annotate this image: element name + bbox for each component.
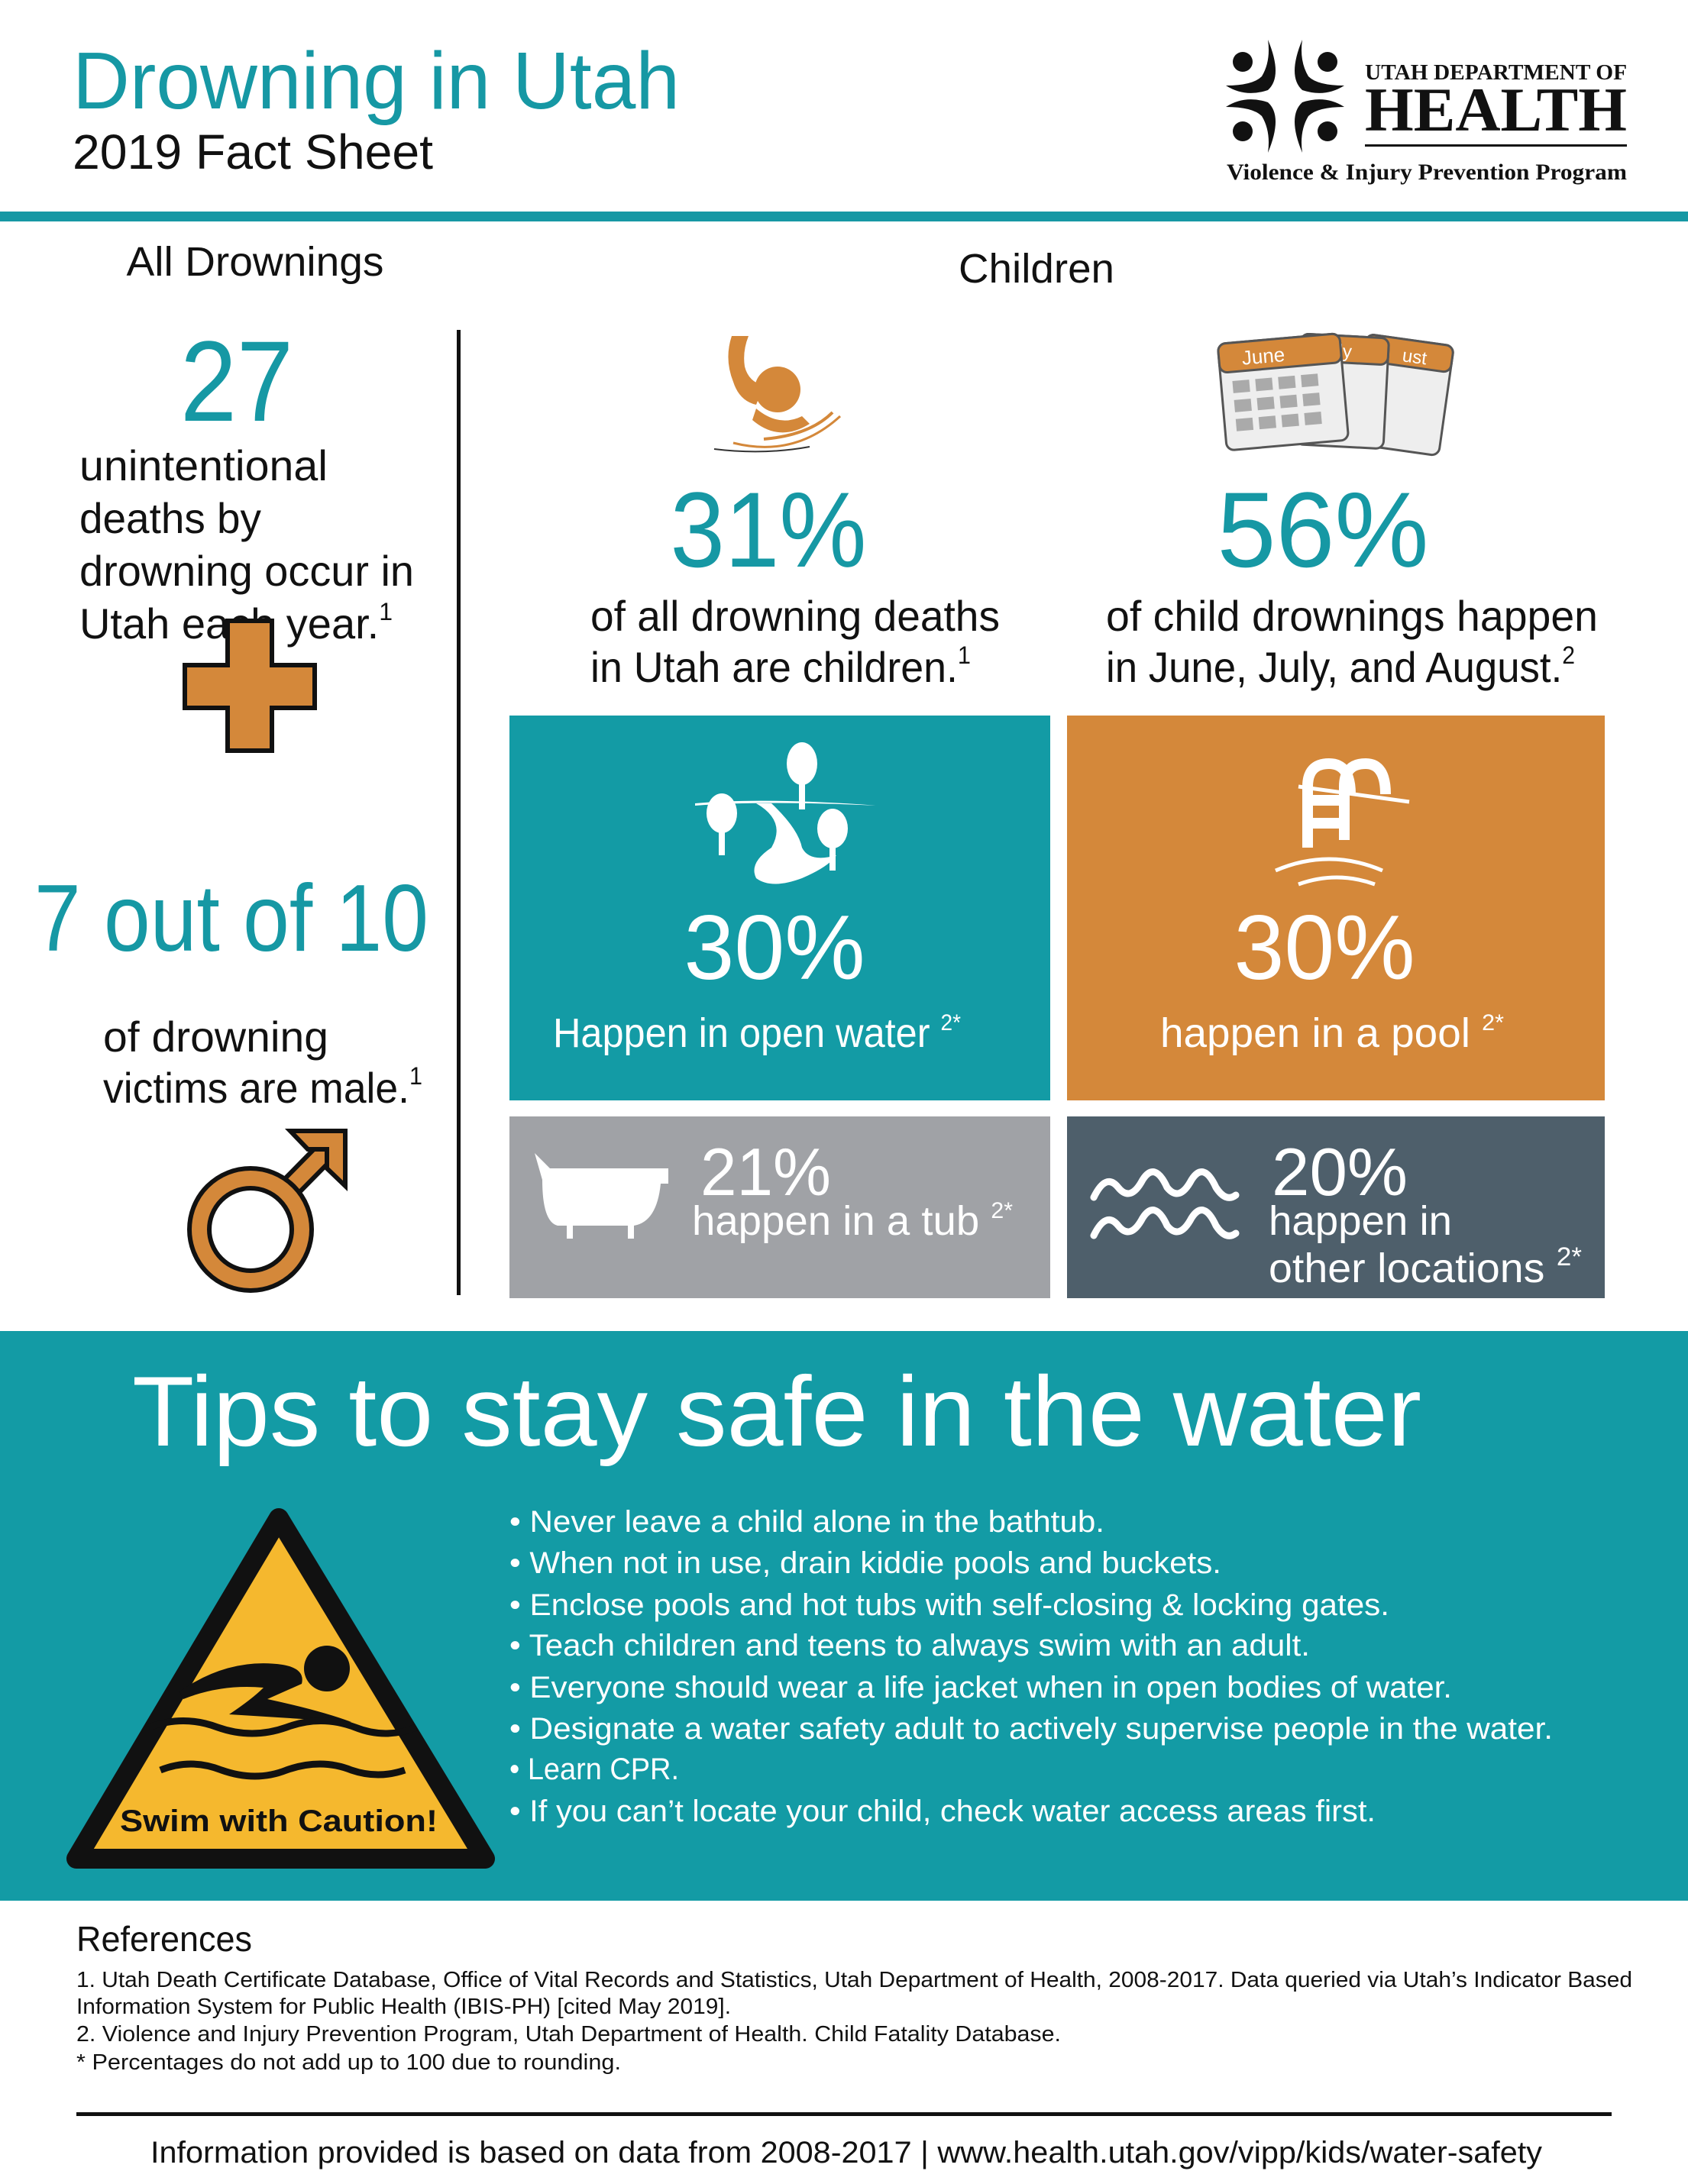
references: References xyxy=(76,1919,252,1959)
logo: Utah Department of Health xyxy=(1226,40,1627,185)
panel: other locations xyxy=(1067,1116,1605,1298)
icon: cross xyxy=(185,621,315,751)
icon: swim with caution sign: Swim with Caution! xyxy=(120,1804,438,1838)
panel: other locations: other locations xyxy=(1269,1245,1537,1291)
logo: Utah Department of Health: UTAH DEPARTMENT OF xyxy=(1365,61,1627,85)
text block: tips list: • Teach children and teens to always swim with an adult. xyxy=(509,1629,1310,1662)
stat: 7 out of 10 male: 7 out of 10 xyxy=(34,866,428,971)
footer: Information provided is based on data from 2008-2017 | www.health.utah.gov/vipp/kids/water-safety xyxy=(150,2136,1542,2169)
panel: other locations: 2* xyxy=(1557,1242,1582,1271)
panel: open water: Happen in open water xyxy=(553,1010,956,1056)
panel: tub: happen in a tub xyxy=(692,1198,976,1244)
references xyxy=(76,1919,1632,2075)
panel: pool xyxy=(1067,716,1605,1100)
panel: tub: 21% xyxy=(700,1134,831,1210)
icon: calendars: ust xyxy=(1401,345,1428,369)
heading: tips: Tips to stay safe in the water xyxy=(132,1355,1421,1467)
stat: 31% children xyxy=(590,470,1000,691)
panel: open water: 30% xyxy=(684,897,865,999)
icon: calendars: ly xyxy=(1338,341,1353,362)
stat: 56% summer: in June, July, and August. xyxy=(1106,643,1590,691)
stat: 56% summer: of child drownings happen xyxy=(1106,592,1598,640)
icon: calendars xyxy=(1217,334,1454,456)
stat: 7 out of 10 male: victims are male. xyxy=(103,1064,424,1112)
stat: 27 deaths: drowning occur in xyxy=(79,547,414,595)
stat: 27 deaths: 27 xyxy=(180,317,293,445)
logo: Utah Department of Health: HEALTH xyxy=(1365,75,1627,144)
text block: tips list: • Enclose pools and hot tubs with self-closing & locking gates. xyxy=(509,1588,1389,1622)
title: 2019 Fact Sheet xyxy=(73,124,433,179)
stat: 56% summer xyxy=(1106,470,1598,691)
references: * Percentages do not add up to 100 due to rounding. xyxy=(76,2050,621,2075)
title: Drowning in Utah xyxy=(73,36,680,126)
references: Information System for Public Health (IBIS-PH) [cited May 2019]. xyxy=(76,1995,731,2019)
panel: tub: 2* xyxy=(991,1198,1013,1223)
icon: pool ladder xyxy=(1276,764,1409,884)
stat: 27 deaths: Utah each year. xyxy=(79,599,379,648)
stat: 7 out of 10 male: of drowning xyxy=(103,1013,328,1061)
text block: tips list: • Never leave a child alone in the bathtub. xyxy=(509,1505,1104,1539)
text block: tips list: • Learn CPR. xyxy=(509,1753,679,1786)
logo: Utah Department of Health: Violence & Injury Prevention Program xyxy=(1227,160,1627,185)
icon: bathtub xyxy=(535,1153,668,1239)
panel: tips xyxy=(0,1331,1688,1901)
heading: Children: Children xyxy=(959,246,1114,292)
panel: open water xyxy=(509,716,1050,1100)
panel: other locations: 20% xyxy=(1272,1134,1408,1210)
stat: 27 deaths: deaths by xyxy=(79,494,261,542)
panel: open water: 2* xyxy=(941,1010,961,1035)
stat: 7 out of 10 male: 1 xyxy=(409,1062,422,1090)
panel: pool: happen in a pool xyxy=(1160,1010,1465,1056)
text block: tips list: • Designate a water safety adult to actively supervise people in the water. xyxy=(509,1712,1553,1746)
panel: other locations: happen in xyxy=(1269,1198,1452,1244)
icon: river and trees xyxy=(695,742,878,884)
title xyxy=(73,36,680,179)
stat: 7 out of 10 male xyxy=(34,866,428,1112)
text block: tips list: • If you can’t locate your child, check water access areas first. xyxy=(509,1795,1376,1828)
stat: 31% children: of all drowning deaths xyxy=(590,592,1000,640)
text block: tips list: • Everyone should wear a life jacket when in open bodies of water. xyxy=(509,1671,1452,1704)
icon: swim with caution sign xyxy=(76,1518,485,1859)
stat: 31% children: 1 xyxy=(958,641,971,669)
stat: 31% children: 31% xyxy=(671,470,866,590)
stat: 31% children: in Utah are children. xyxy=(590,643,973,691)
stat: 27 deaths xyxy=(79,317,414,648)
references: 2. Violence and Injury Prevention Program, Utah Department of Health. Child Fatality Database. xyxy=(76,2022,1061,2047)
stat: 56% summer: 56% xyxy=(1217,470,1428,590)
panel: pool: 30% xyxy=(1234,897,1415,999)
icon: waves xyxy=(1094,1172,1236,1236)
icon: drowning child xyxy=(714,336,840,451)
text block: tips list xyxy=(509,1505,1553,1828)
stat: 27 deaths: 1 xyxy=(379,598,393,625)
icon: health symbol xyxy=(1226,40,1344,153)
icon: male symbol xyxy=(199,1131,345,1281)
references: 1. Utah Death Certificate Database, Office of Vital Records and Statistics, Utah Department of Health, 2008-2017. Data queried via Utah’s Indicator Based xyxy=(76,1968,1632,1992)
panel: tub xyxy=(509,1116,1050,1298)
icon: calendars: June xyxy=(1241,343,1285,370)
text block: tips list: • When not in use, drain kiddie pools and buckets. xyxy=(509,1546,1221,1580)
stat: 27 deaths: unintentional xyxy=(79,441,328,489)
stat: 56% summer: 2 xyxy=(1562,641,1575,669)
panel: pool: 2* xyxy=(1482,1010,1504,1035)
heading: All Drownings: All Drownings xyxy=(127,239,383,285)
